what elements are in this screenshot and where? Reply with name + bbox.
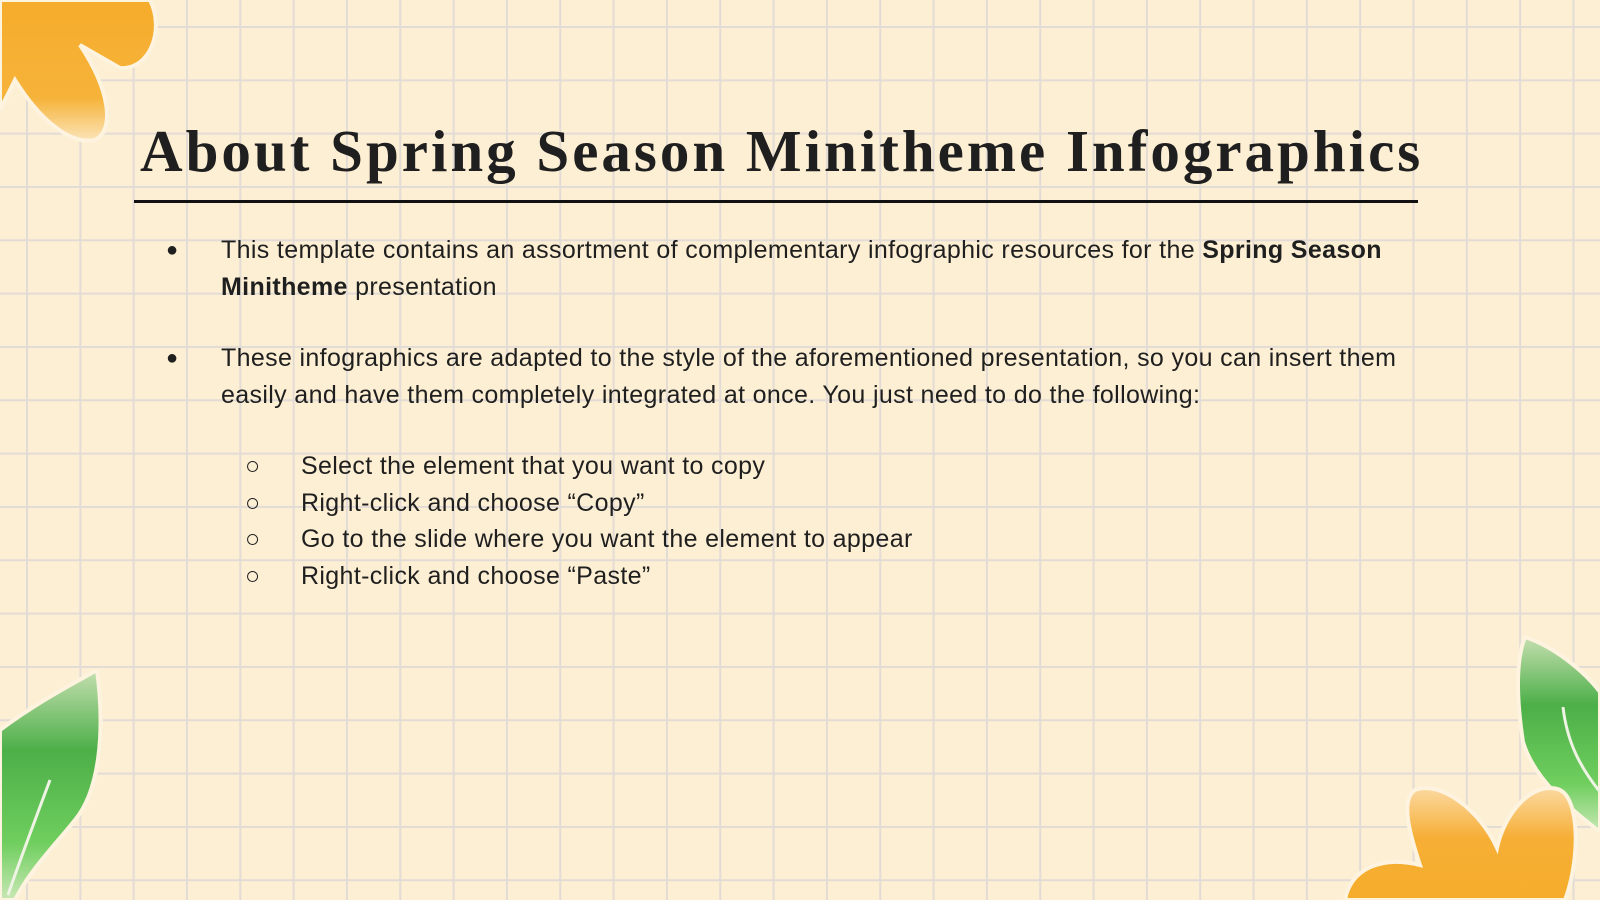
sub-steps list: ○	[245, 525, 260, 553]
bullet 1: ●	[166, 239, 178, 261]
bullet 1	[166, 236, 1382, 301]
sub-steps list: Right-click and choose “Paste”	[301, 562, 651, 590]
sub-steps list: Select the element that you want to copy	[301, 452, 765, 480]
decoration: bottom-right leaf	[1516, 634, 1600, 832]
decoration: bottom-right flower	[1343, 786, 1578, 900]
bullet 1: This template contains an assortment of complementary infographic resources for the Spring Season	[221, 236, 1382, 264]
sub-steps list: Go to the slide where you want the element to appear	[301, 525, 913, 553]
decoration: bottom-left leaf	[0, 670, 102, 900]
sub-steps list	[245, 452, 913, 590]
sub-steps list: ○	[245, 489, 260, 517]
decoration: top-left flower	[0, 0, 158, 142]
bullet 2: These infographics are adapted to the style of the aforementioned presentation, so you can insert them	[221, 344, 1396, 372]
title: About Spring Season Minitheme Infographics	[140, 118, 1423, 184]
bullet 2: ●	[166, 347, 178, 369]
sub-steps list: ○	[245, 452, 260, 480]
bullet 2	[166, 344, 1396, 409]
sub-steps list: Right-click and choose “Copy”	[301, 489, 645, 517]
bullet 2: easily and have them completely integrated at once. You just need to do the following:	[221, 381, 1200, 409]
bullet 1: Minitheme presentation	[221, 273, 497, 301]
sub-steps list: ○	[245, 562, 260, 590]
